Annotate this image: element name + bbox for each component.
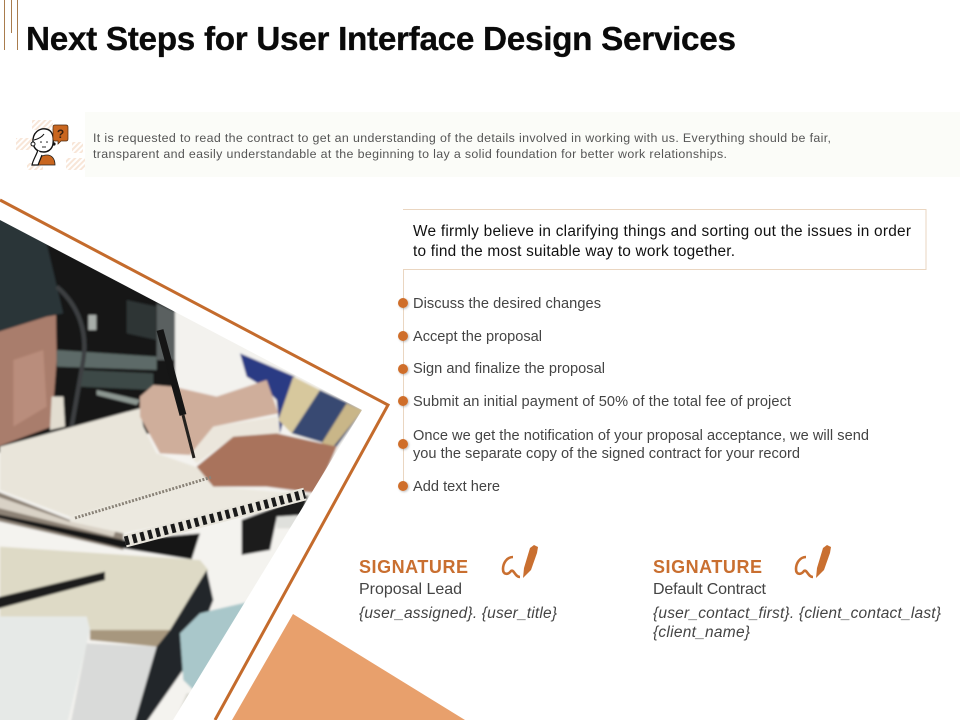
- intro text: [93, 131, 831, 161]
- decorative corner lines: [4, 0, 18, 50]
- peach triangle: [232, 614, 465, 720]
- step texts: Add text here: [413, 479, 500, 495]
- panel: signature proposal lead: {user_assigned}. {user_title}: [359, 605, 557, 622]
- panel: signature default contract: {user_contact_first}. {client_contact_last}: [653, 605, 941, 622]
- panel: signature default contract: {client_name}: [653, 624, 750, 641]
- panel: intro band: [85, 112, 960, 177]
- step texts: you the separate copy of the signed contract for your record: [413, 446, 800, 462]
- step texts: Submit an initial payment of 50% of the total fee of project: [413, 394, 791, 410]
- panel: steps list: [398, 269, 869, 495]
- step texts: Discuss the desired changes: [413, 296, 601, 312]
- panel: signature default contract: Default Contract: [653, 581, 767, 598]
- intro text: transparent and easily understandable at the beginning to lay a solid foundation for better work relationships.: [93, 147, 727, 161]
- panel: signature proposal lead: [359, 545, 557, 622]
- pen: [160, 330, 183, 415]
- panel: signature proposal lead: SIGNATURE: [359, 557, 468, 577]
- panel: signature default contract: SIGNATURE: [653, 557, 762, 577]
- frame line around photo: [0, 200, 388, 720]
- icon: support person with question bubble: [16, 120, 85, 170]
- icon: signature pen: [503, 545, 538, 578]
- step texts: [413, 296, 869, 495]
- photo: hands writing in a notebook: [0, 220, 362, 720]
- step texts: Sign and finalize the proposal: [413, 361, 605, 377]
- title: Next Steps for User Interface Design Services: [26, 21, 736, 58]
- icon: signature pen: [796, 545, 831, 578]
- icon: support person with question bubble: ?: [57, 127, 64, 141]
- statement text: to find the most suitable way to work together.: [413, 243, 735, 260]
- step texts: Accept the proposal: [413, 329, 542, 345]
- statement text: We firmly believe in clarifying things and sorting out the issues in order: [413, 223, 911, 240]
- panel: signature default contract: [653, 545, 941, 641]
- intro text: It is requested to read the contract to get an understanding of the details involved in working with us. Everything should be fair,: [93, 131, 831, 145]
- step texts: Once we get the notification of your proposal acceptance, we will send: [413, 428, 869, 444]
- notebook binding: [125, 494, 305, 541]
- bullets: [398, 298, 408, 491]
- panel: signature proposal lead: Proposal Lead: [359, 581, 462, 598]
- statement text: [413, 223, 911, 260]
- panel: belief statement: [403, 210, 926, 270]
